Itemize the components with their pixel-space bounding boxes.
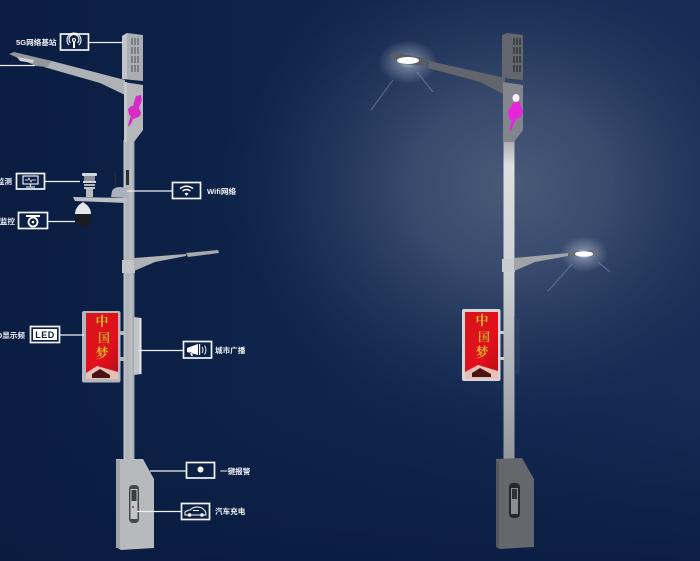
label: LED display	[0, 326, 60, 342]
pole shaft	[124, 140, 134, 462]
base cabinet with charger	[116, 459, 154, 550]
label: environment monitoring	[0, 174, 44, 189]
dome camera	[75, 202, 91, 227]
label: 5G base station	[16, 33, 88, 50]
LED screen: 国	[98, 329, 110, 346]
upper lamp arm	[9, 52, 125, 95]
head panel with flower	[124, 82, 143, 142]
label: wifi	[172, 182, 236, 198]
LED screen lit: 梦	[475, 342, 489, 361]
label: one-key alarm: 一键报警	[220, 466, 251, 476]
LED screen	[82, 311, 124, 382]
mounting bracket	[73, 197, 127, 203]
head panel with lit flower	[503, 82, 523, 142]
broadcast speaker	[134, 317, 142, 375]
top box dark	[502, 33, 523, 80]
label: wifi: Wifi网络	[207, 186, 236, 196]
label: car charging	[182, 504, 246, 520]
weather sensor	[82, 173, 97, 197]
label: LED display: LED	[35, 330, 55, 340]
broadcast speaker lit	[514, 317, 520, 375]
left smart pole	[9, 33, 219, 550]
LED screen: 梦	[95, 343, 109, 362]
lower lamp arm	[122, 250, 219, 273]
label: security monitoring	[0, 212, 48, 228]
upper lamp glow	[371, 40, 438, 110]
wifi router	[111, 173, 128, 198]
top 5G box	[122, 33, 143, 81]
label: one-key alarm	[186, 462, 251, 478]
base cabinet dark	[496, 458, 534, 549]
LED screen lit: 中	[475, 310, 489, 329]
label: city broadcast: 城市广播	[215, 345, 246, 355]
upper lamp arm lit	[389, 52, 505, 95]
LED screen: 中	[95, 311, 109, 330]
label: 5G base station: 5G网络基站	[16, 37, 57, 47]
lower lamp arm lit	[502, 236, 610, 291]
LED screen lit	[462, 309, 504, 381]
right illuminated pole	[371, 33, 610, 549]
label: car charging: 汽车充电	[215, 506, 246, 516]
callout lines	[0, 42, 186, 512]
LED screen lit: 国	[478, 328, 490, 345]
label: city broadcast	[184, 342, 246, 358]
pole shaft lit	[504, 140, 514, 460]
